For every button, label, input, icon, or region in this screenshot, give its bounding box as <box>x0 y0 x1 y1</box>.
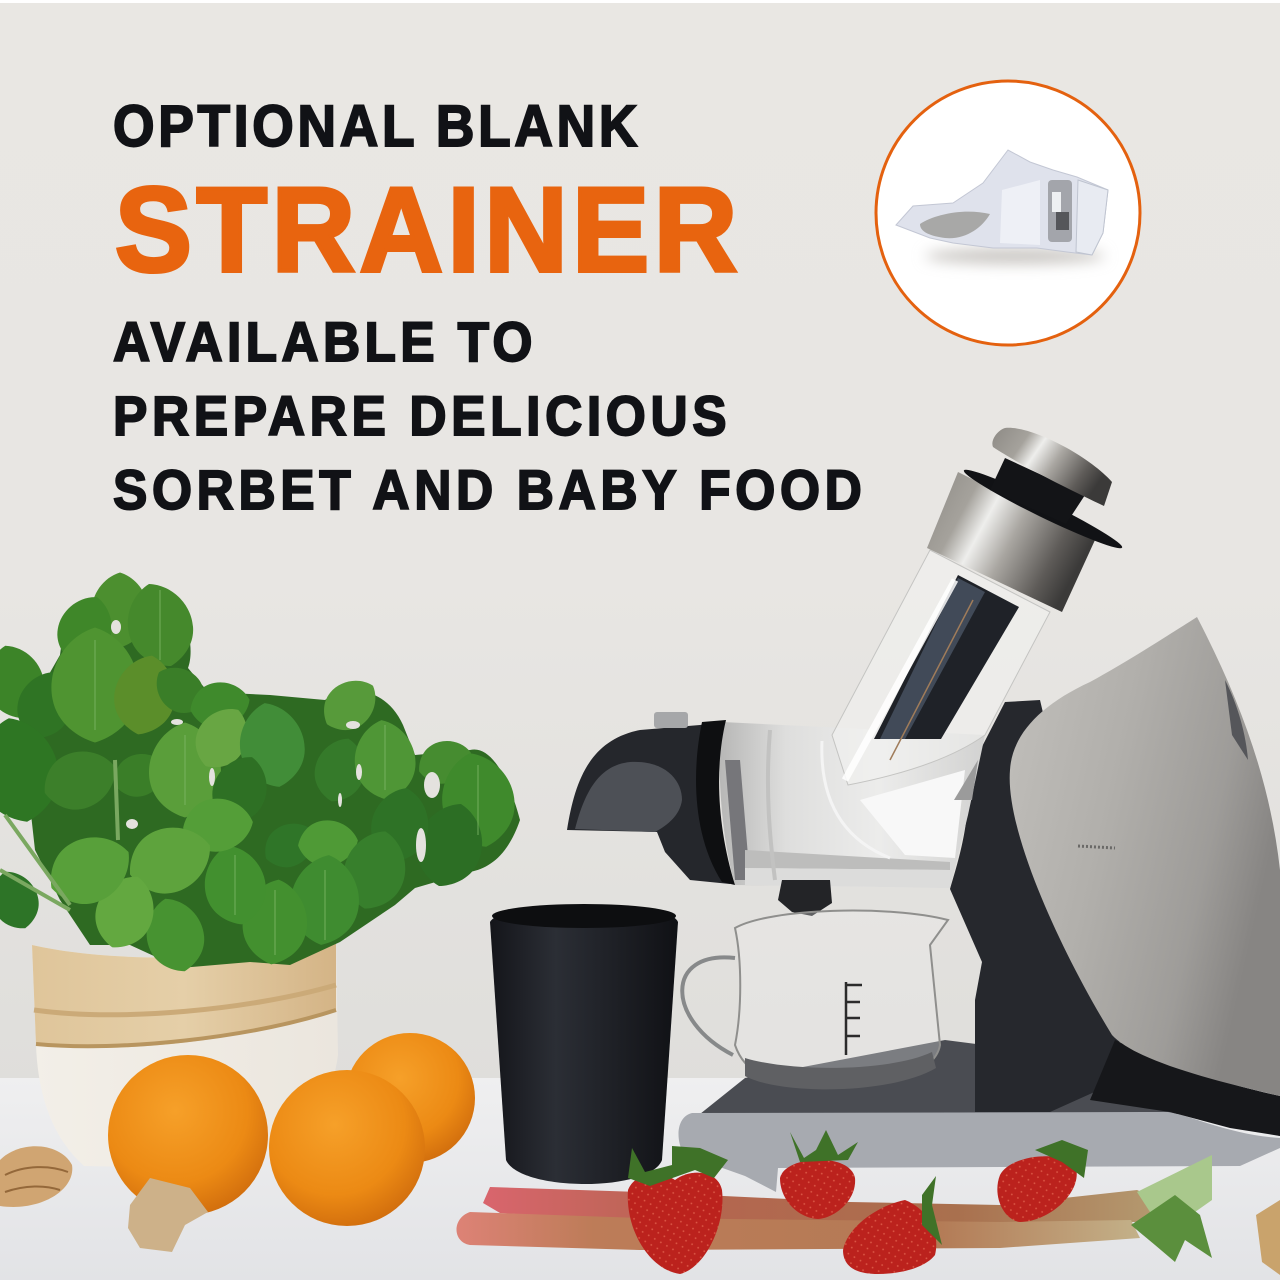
strawberry four <box>997 1156 1077 1222</box>
juicer horizontal chamber <box>720 722 985 888</box>
callout: blank strainer accessory <box>876 81 1140 345</box>
strawberry three <box>843 1200 936 1274</box>
text block: description: AVAILABLE TO <box>113 311 533 373</box>
juicer lid <box>992 428 1112 506</box>
basil foliage mass <box>25 591 520 968</box>
juicer pusher <box>874 575 1019 739</box>
strawberries <box>628 1130 1088 1274</box>
juicer <box>567 428 1280 1192</box>
juicer silver body <box>1010 617 1280 1096</box>
juicer outlet <box>778 880 832 916</box>
juicer lid stem <box>990 458 1085 524</box>
juicer flange <box>960 463 1126 555</box>
gaps showing the wall through the foliage <box>111 620 440 862</box>
black cup <box>490 904 678 1184</box>
juicer chute glass <box>832 550 1050 785</box>
plant pot <box>32 938 338 1168</box>
juicer dark base <box>700 1040 1280 1136</box>
juicer base plate <box>678 1112 1280 1192</box>
juicer dark neck <box>950 700 1120 1112</box>
juicer front cap and spout <box>567 722 730 884</box>
text block: description: PREPARE DELICIOUS <box>113 385 727 447</box>
oranges <box>108 1033 475 1226</box>
strawberry two <box>780 1160 855 1219</box>
glass jug <box>682 911 948 1089</box>
heading: strainer: STRAINER <box>115 163 737 297</box>
physalis husks <box>0 1146 1280 1275</box>
rhubarb stalks <box>456 1155 1212 1262</box>
table surface <box>0 1078 1280 1280</box>
text block: description <box>113 311 862 521</box>
basil plant <box>0 572 522 979</box>
strawberry one <box>628 1173 722 1274</box>
juicer chute highlight <box>845 580 955 780</box>
juicer steel collar <box>927 472 1095 612</box>
text block: description: SORBET AND BABY FOOD <box>113 459 862 521</box>
heading: optional blank: OPTIONAL BLANK <box>113 94 637 158</box>
